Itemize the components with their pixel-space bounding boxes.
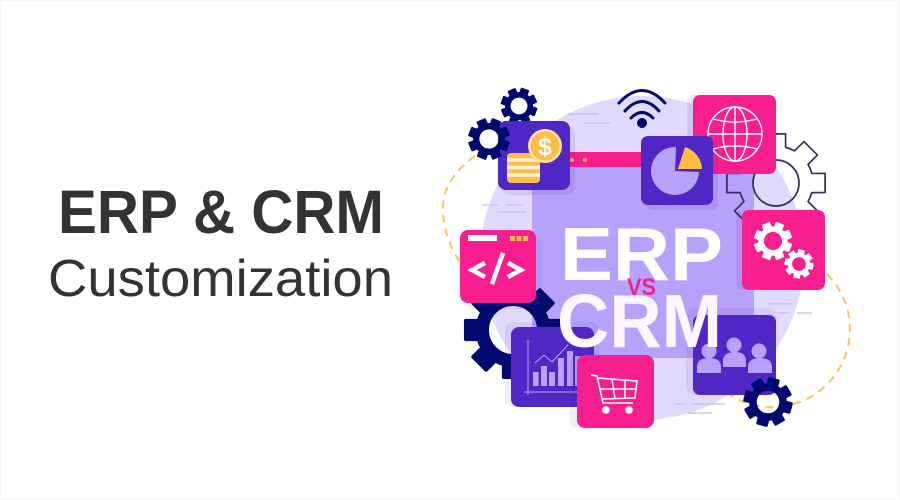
card: coins (498, 121, 575, 195)
label: ERP: ERP (560, 212, 723, 296)
dollar coin: $ (538, 133, 552, 161)
icon: white gear small (783, 248, 815, 280)
label: VS: VS (627, 274, 656, 301)
card: globe (687, 95, 776, 174)
icon: navy gear (463, 113, 515, 165)
dashed orbit left (443, 156, 475, 262)
heading: ERP & CRM: ERP & CRM (58, 178, 384, 246)
pie slice base (651, 147, 699, 195)
icon: bottom navy gear (740, 374, 796, 430)
card: bar chart (505, 322, 599, 407)
chart axes and line (524, 340, 582, 395)
diagram label: ERP vs CRM (557, 212, 723, 363)
title (48, 178, 393, 308)
pie slice highlight (678, 147, 702, 169)
icon: outline gear (727, 134, 825, 232)
dashed orbit right (730, 274, 850, 407)
icon: large navy gear (466, 283, 560, 377)
card: gears (736, 210, 825, 290)
icon: code brackets (472, 253, 521, 284)
icon: globe (708, 107, 762, 161)
subheading: Customization: Customization (48, 250, 393, 308)
illustration background disc (480, 96, 804, 420)
card: pie chart (641, 136, 718, 210)
icon: white gear large (749, 217, 797, 265)
infographic canvas (50, 88, 851, 428)
label: CRM: CRM (557, 279, 722, 363)
card: shopping cart (570, 355, 654, 428)
card: code window (460, 230, 542, 309)
icon: cart (591, 375, 637, 413)
icon: wifi (619, 90, 665, 128)
chart bars (533, 351, 581, 386)
card: people (686, 308, 776, 395)
coin stack (507, 153, 540, 183)
icon: people group (697, 338, 772, 373)
icon: small navy gear (497, 84, 541, 128)
connector bar (568, 152, 644, 167)
decorative speed lines (482, 114, 812, 413)
